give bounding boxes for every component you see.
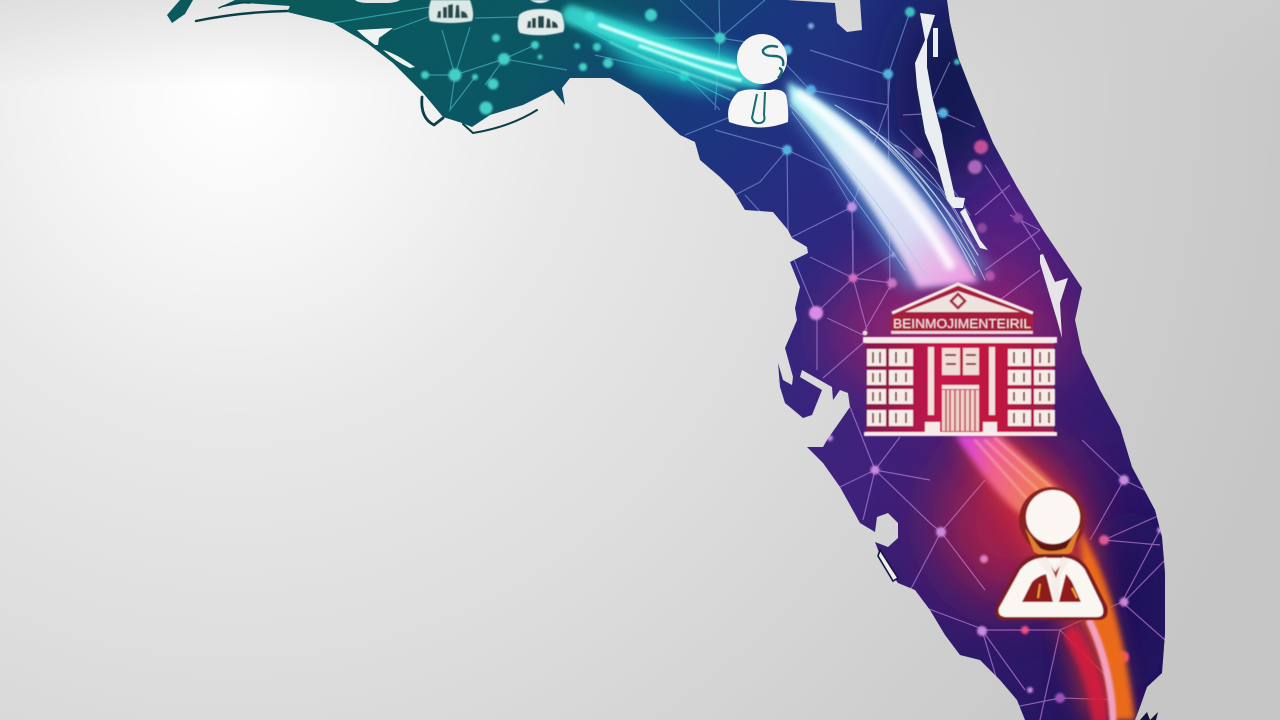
icon: small person 1 <box>429 0 473 23</box>
icon: person south, red <box>995 487 1108 620</box>
icon: small person top left, fragment <box>355 0 400 3</box>
southwest sliver island <box>878 550 898 581</box>
joint at barrier <box>463 124 473 133</box>
frieze band <box>891 314 1033 333</box>
ring <box>1019 487 1085 553</box>
land fill <box>167 0 1165 720</box>
land shading <box>830 0 1170 700</box>
light beam: white and blue segment <box>788 78 992 290</box>
light beam: magenta and orange segment <box>955 435 1135 720</box>
panhandle coast strokes <box>196 3 537 133</box>
entablature <box>863 337 1057 343</box>
left windows <box>867 349 913 426</box>
light beam: teal segment <box>570 10 755 100</box>
map of Florida <box>167 0 1165 720</box>
pediment <box>892 283 1033 316</box>
southern tip keys <box>1140 712 1158 720</box>
columns <box>928 347 995 415</box>
network nodes <box>421 7 1163 703</box>
centre windows <box>942 348 979 375</box>
steps <box>925 422 997 433</box>
base <box>864 432 1057 436</box>
frieze lettering: BEINMOJIMENTEIRIL <box>893 316 1031 331</box>
collar and tie <box>1036 557 1070 603</box>
door <box>942 385 979 431</box>
panhandle inlets <box>357 28 415 68</box>
barrier strip <box>473 110 537 133</box>
bay curve <box>422 97 443 125</box>
facade <box>866 343 1054 433</box>
icon: small person 2 <box>518 0 564 35</box>
east barrier island <box>1040 254 1068 338</box>
east coast lagoon <box>915 13 988 250</box>
icon: courthouse building <box>862 283 1057 436</box>
body <box>999 558 1103 617</box>
body outline <box>995 554 1108 620</box>
right windows <box>1008 349 1055 426</box>
head <box>1026 490 1080 544</box>
upper stroke <box>219 3 250 8</box>
icon: person north, teal <box>728 34 788 128</box>
far west strokes <box>196 11 287 21</box>
window glazing <box>873 352 1049 423</box>
jacket opening <box>1022 574 1081 602</box>
network lines <box>333 0 1165 720</box>
